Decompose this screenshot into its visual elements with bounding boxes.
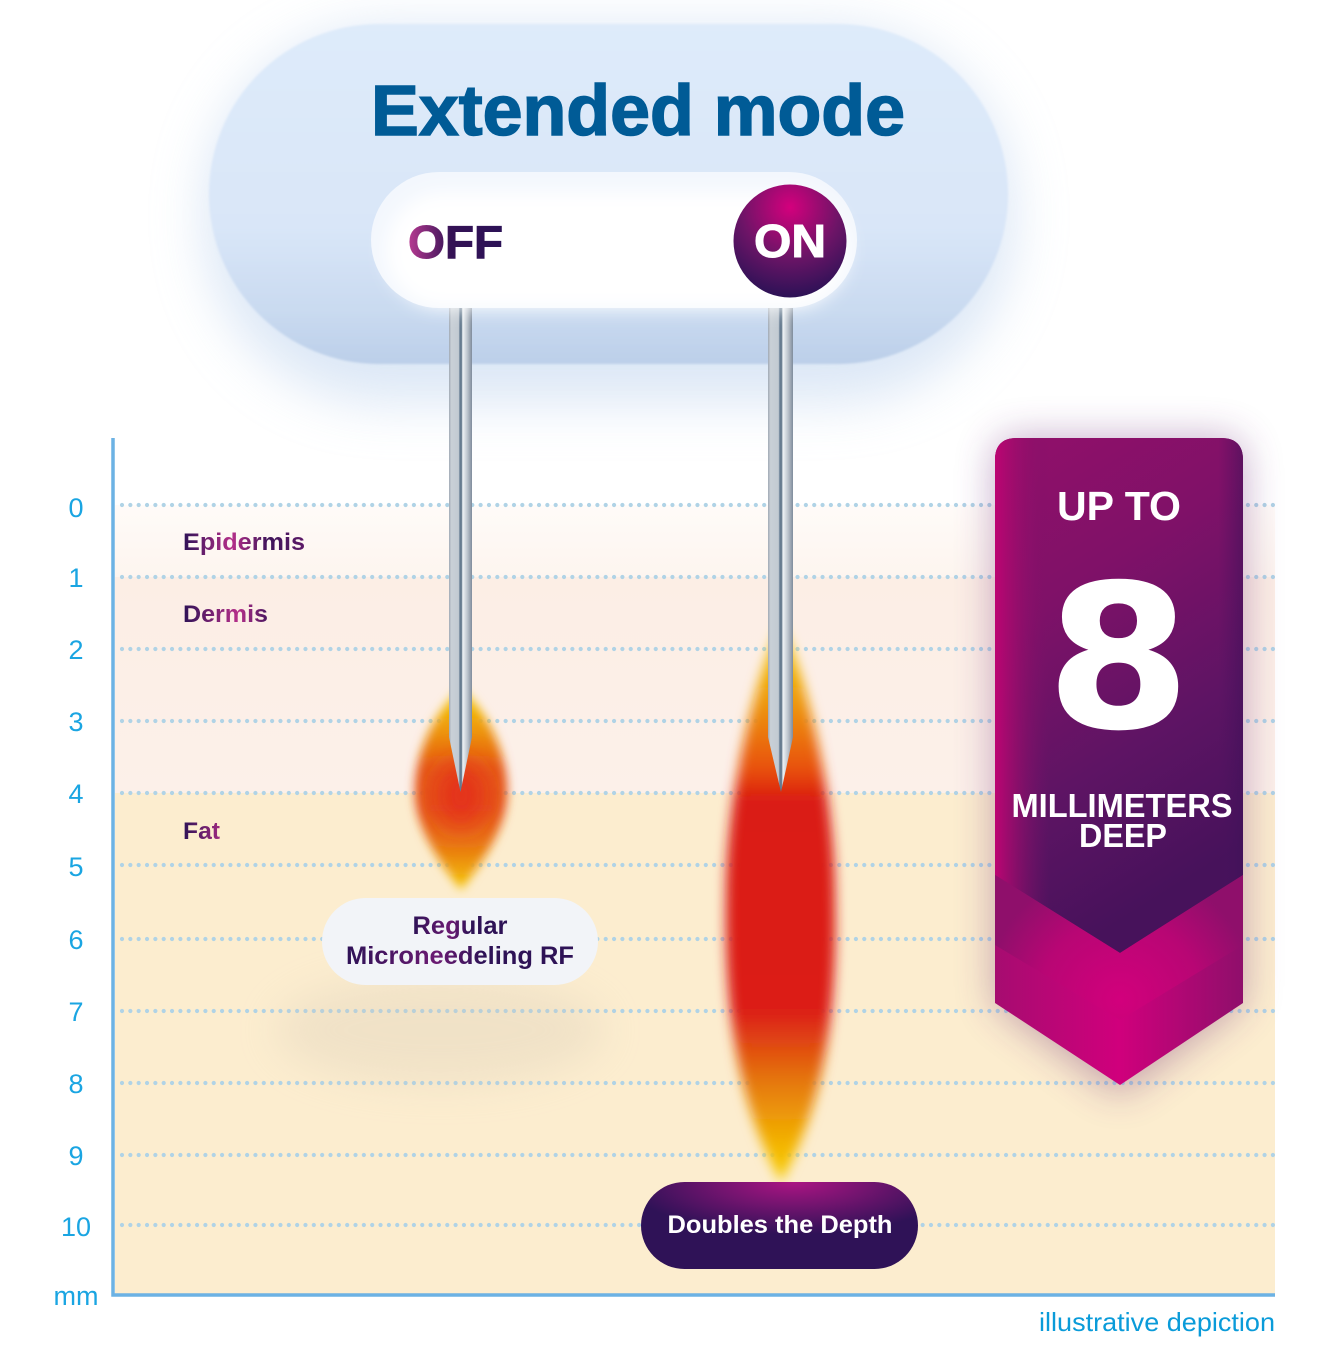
layer labels: Epidermis	[183, 529, 305, 556]
switch track	[371, 172, 857, 308]
axis numbers: mm	[54, 1281, 98, 1311]
axis numbers: 8	[68, 1069, 84, 1099]
callout: doubles the depth	[641, 1182, 918, 1269]
axis numbers: 0	[68, 493, 84, 523]
axis numbers: 3	[68, 707, 84, 737]
flame left	[415, 688, 507, 890]
axis numbers: 10	[61, 1212, 91, 1242]
banner	[995, 438, 1243, 1085]
banner text	[1012, 483, 1232, 854]
chart axes	[113, 438, 1275, 1295]
axis numbers: 4	[68, 779, 84, 809]
banner shadow	[995, 438, 1243, 1095]
axis numbers: 9	[68, 1141, 84, 1171]
banner chevron	[995, 875, 1243, 1020]
layer labels	[183, 529, 305, 845]
skin depth background	[115, 505, 1275, 1295]
on button: ON	[754, 215, 826, 267]
off label: OFF	[408, 216, 503, 268]
axis numbers: 2	[68, 635, 84, 665]
title: Extended mode	[371, 72, 905, 151]
caption: illustrative depiction	[1039, 1307, 1275, 1337]
on button	[734, 184, 846, 298]
callout shadow	[275, 975, 605, 1085]
needle left body	[449, 308, 472, 792]
axis numbers: 5	[68, 852, 84, 882]
header pill halo	[205, 28, 1013, 403]
callout: regular microneedling: Microneedeling RF	[346, 942, 574, 970]
axis numbers	[54, 493, 98, 1311]
depth grid lines	[122, 505, 1275, 1225]
axis numbers: 6	[68, 925, 84, 955]
flame right	[726, 625, 835, 1182]
banner text: 8	[1046, 542, 1190, 774]
layer labels: Fat	[183, 818, 220, 845]
callout: regular microneedling	[322, 898, 598, 985]
banner text: MILLIMETERS	[1012, 787, 1232, 824]
layer labels: Dermis	[183, 601, 268, 628]
banner text: UP TO	[1057, 483, 1181, 529]
needle right body	[768, 308, 793, 792]
callout: regular microneedling: Regular	[412, 912, 508, 940]
banner text: DEEP	[1079, 817, 1167, 854]
axis numbers: 1	[68, 563, 84, 593]
axis numbers: 7	[68, 997, 84, 1027]
callout: doubles the depth: Doubles the Depth	[668, 1211, 892, 1239]
header pill	[209, 24, 1008, 364]
